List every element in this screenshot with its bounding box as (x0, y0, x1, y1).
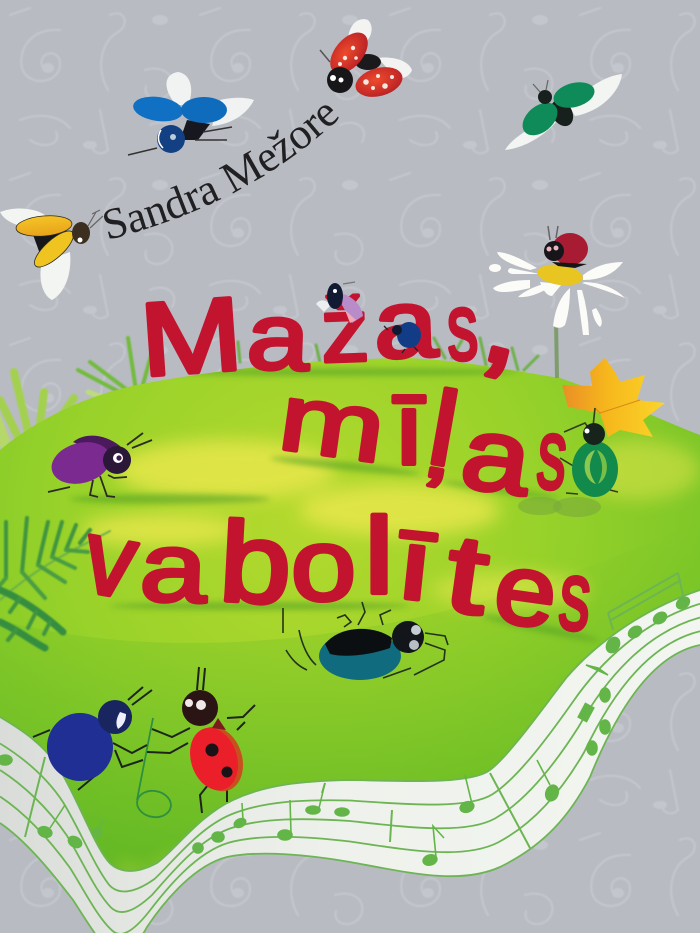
bar lines and beam (25, 573, 684, 848)
small blue beetle (384, 322, 421, 353)
ladybird: flying top (320, 19, 412, 102)
title line 1: a (372, 270, 440, 379)
music staff ribbon (0, 573, 700, 933)
ladybird dancing (147, 667, 255, 813)
hill highlights and shadows (70, 368, 700, 880)
beetle: green flying (505, 74, 622, 150)
title (76, 252, 595, 652)
title line 3: o (291, 509, 356, 622)
grass behind hill (0, 338, 538, 460)
title line 3: l (364, 495, 394, 616)
beetle: blue flying (128, 72, 254, 155)
hill (0, 358, 700, 880)
small flying insect (316, 282, 363, 323)
green beetle with leaf (518, 408, 618, 517)
title line 3 (76, 495, 595, 652)
title line 2: a (455, 394, 538, 517)
title line 3: v (76, 496, 146, 621)
petals (489, 252, 625, 335)
staff lines (0, 573, 700, 933)
title line 3: a (138, 512, 209, 624)
title line 2: m (273, 363, 392, 483)
purple beetle (47, 433, 152, 497)
maple leaf (562, 358, 665, 437)
title line 3: s (555, 541, 595, 652)
beetle: yellow flying (0, 208, 103, 300)
title line 2: s (533, 398, 572, 511)
dancing note (135, 718, 173, 820)
teal beetle on its back (283, 602, 448, 680)
title line 1 (136, 252, 542, 399)
daisy flower (489, 252, 625, 378)
title line 1: a (245, 283, 312, 390)
title line 3: e (488, 531, 564, 650)
title line 2: ļ (421, 369, 467, 489)
fern (0, 518, 110, 648)
title line 3: ī (392, 507, 439, 622)
blue beetle dancing (33, 687, 152, 790)
title line 1: ž (319, 279, 371, 381)
title line 1: s (445, 273, 480, 380)
title line 1: , (472, 252, 542, 391)
title line 3: b (217, 498, 294, 628)
title line 2: ī (393, 373, 425, 487)
author name: Sandra Mežore (104, 105, 339, 238)
title line 2 (273, 363, 572, 517)
title line 1: M (136, 276, 246, 399)
music notes (0, 595, 692, 867)
title line 3: t (439, 512, 496, 638)
ladybird: on daisy (544, 226, 588, 268)
